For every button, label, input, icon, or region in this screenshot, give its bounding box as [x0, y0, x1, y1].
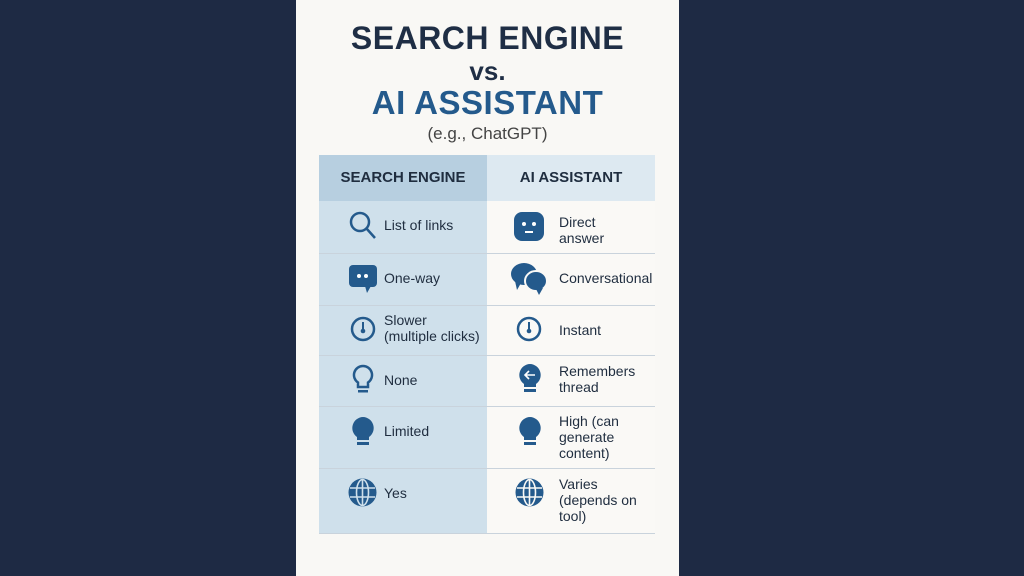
row 1	[350, 212, 604, 246]
header: ai assistant	[487, 155, 655, 201]
row 3	[350, 312, 601, 344]
table: Yes	[384, 485, 407, 501]
row 5	[352, 413, 619, 461]
table: content)	[559, 445, 610, 461]
table: Varies	[559, 476, 598, 492]
note: (e.g., ChatGPT)	[428, 124, 547, 143]
row 6	[348, 476, 637, 524]
icon: globe	[348, 478, 376, 506]
table: High (can	[559, 413, 619, 429]
table: (depends on	[559, 492, 637, 508]
icon: bot face	[514, 212, 544, 241]
table: thread	[559, 379, 599, 395]
icon: two bubbles	[511, 263, 546, 295]
column: search engine	[319, 155, 487, 533]
table: Instant	[559, 322, 601, 338]
column: ai assistant	[487, 155, 655, 533]
table: None	[384, 372, 417, 388]
panel: infographic	[296, 0, 679, 576]
row 4	[352, 363, 635, 395]
table: answer	[559, 230, 604, 246]
table: Direct	[559, 214, 596, 230]
header: search engine	[319, 155, 487, 201]
title: SEARCH ENGINE	[351, 20, 624, 56]
header: ai assistant: AI ASSISTANT	[520, 169, 622, 186]
row 2	[349, 263, 652, 295]
subtitle: AI assistant: AI ASSISTANT	[372, 84, 603, 121]
table	[319, 155, 655, 534]
icon: clock	[516, 316, 542, 342]
table: tool)	[559, 508, 586, 524]
table: One-way	[384, 270, 440, 286]
icon: bulb filled	[352, 417, 374, 445]
icon: magnifier	[350, 212, 376, 239]
table: generate	[559, 429, 614, 445]
vs: vs.	[469, 56, 506, 86]
table: Remembers	[559, 363, 635, 379]
icon: globe	[516, 478, 544, 506]
table: Limited	[384, 423, 429, 439]
icon: bulb memory	[519, 364, 541, 392]
icon: speech bubble	[349, 265, 377, 293]
table: List of links	[384, 217, 453, 233]
icon: bulb outline	[352, 364, 374, 392]
table: Slower	[384, 312, 427, 328]
icon: clock	[350, 316, 376, 342]
table: Conversational	[559, 270, 652, 286]
header: search engine: SEARCH ENGINE	[340, 169, 466, 186]
icon: bulb filled	[519, 417, 541, 445]
table: (multiple clicks)	[384, 328, 480, 344]
